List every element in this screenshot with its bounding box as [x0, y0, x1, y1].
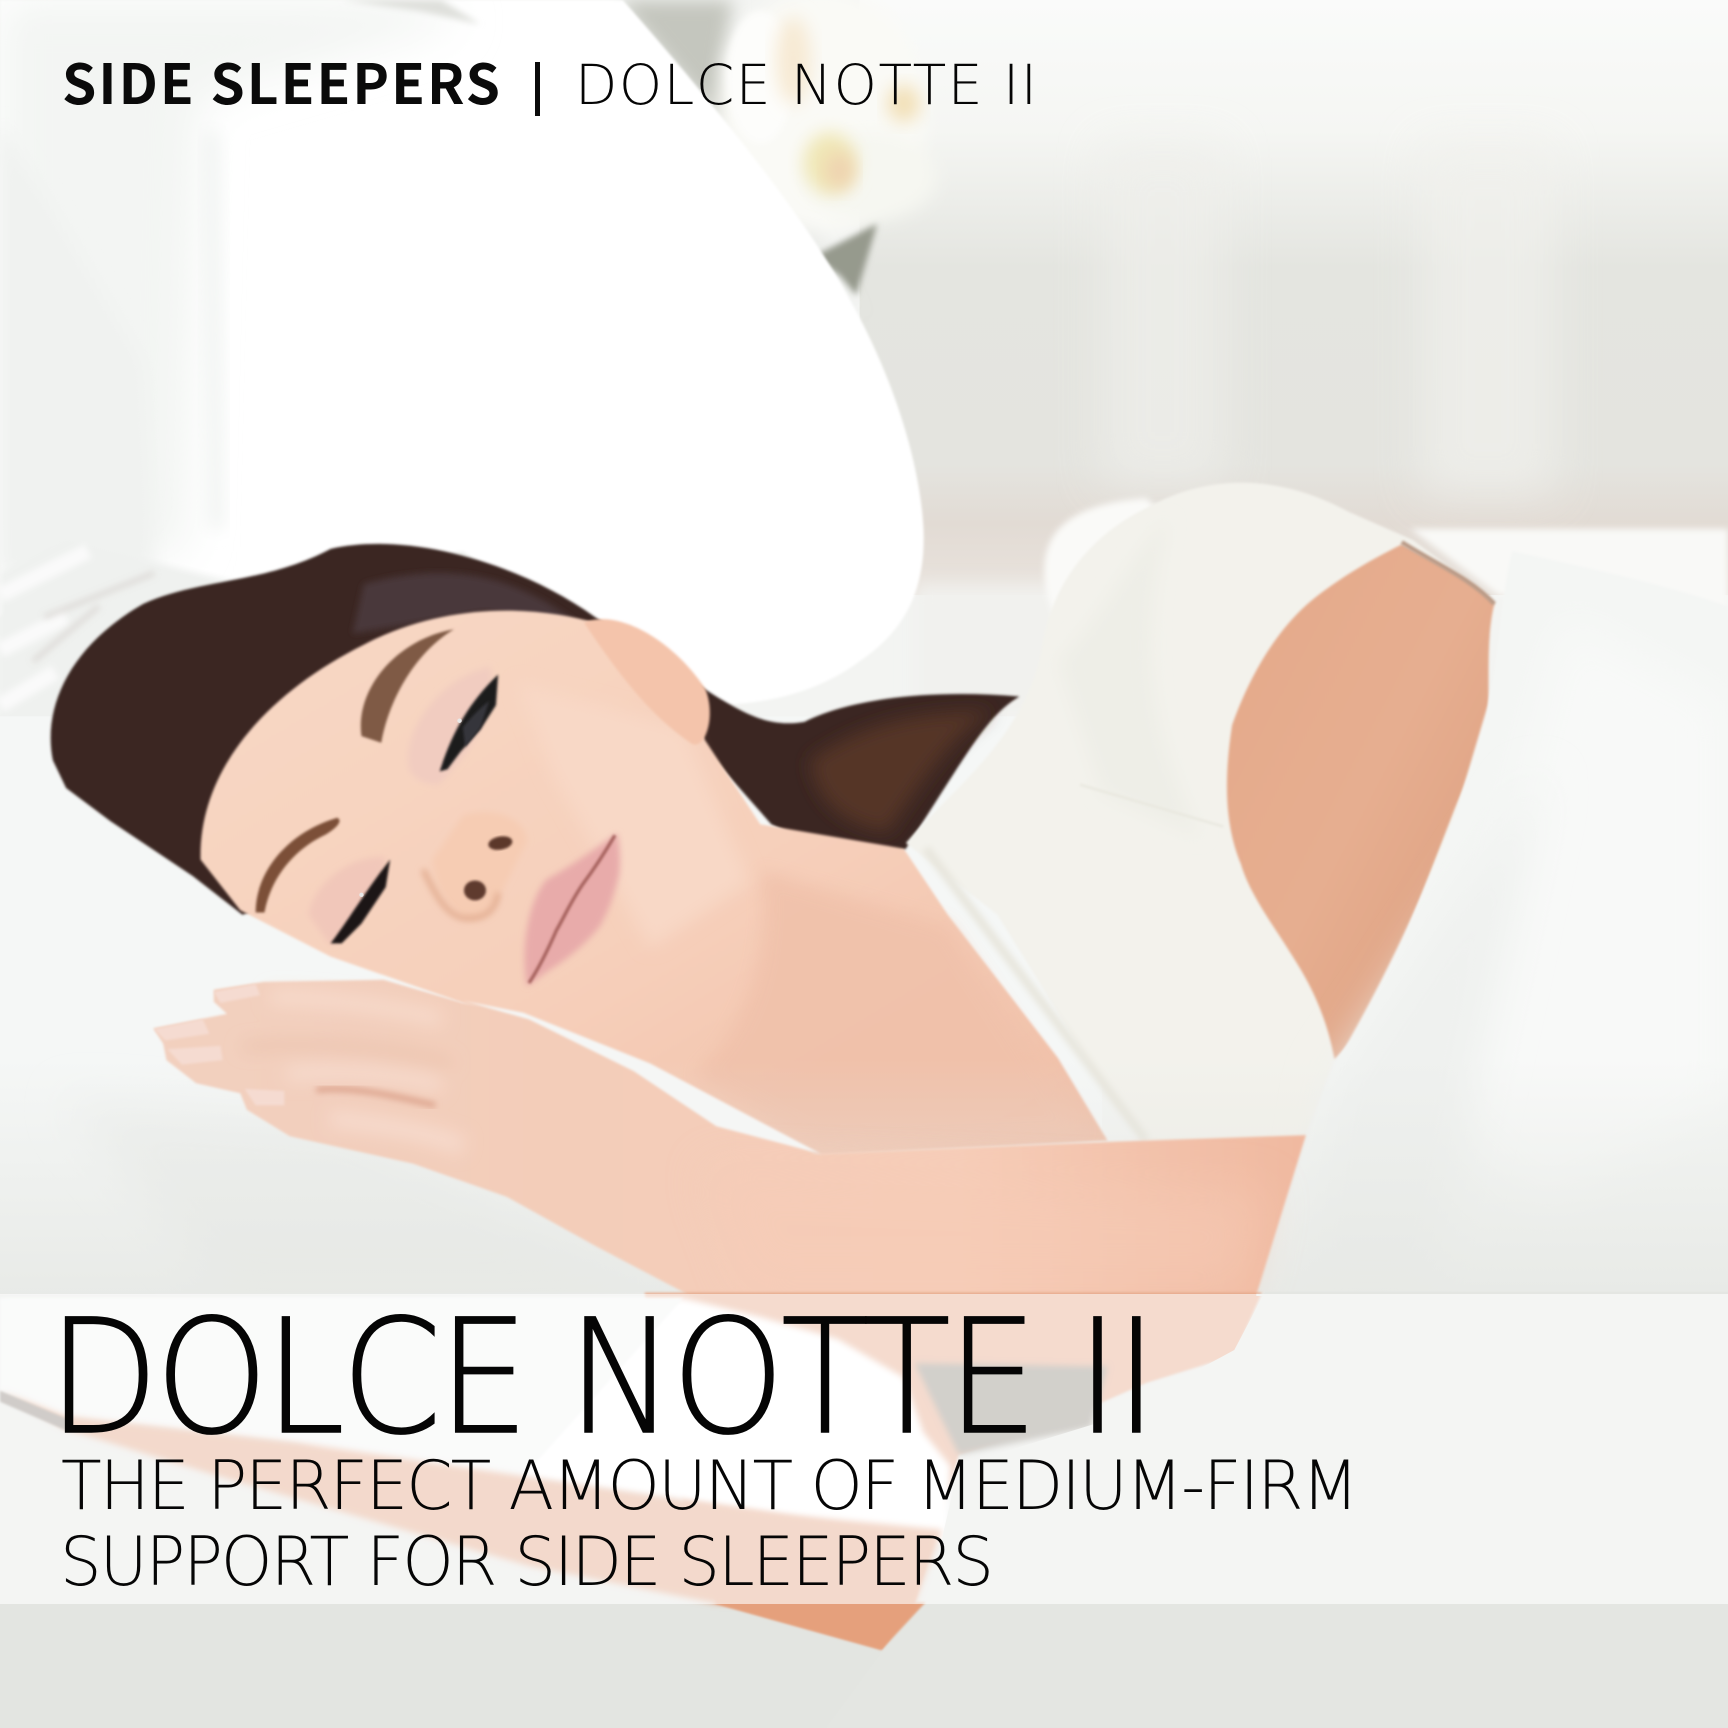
header: divider bar: [535, 62, 540, 116]
face and neck: [201, 611, 1108, 1155]
header line: [62, 40, 1037, 120]
lower body seen through translucent band: [0, 1292, 1728, 1728]
main title: DOLCE NOTTE II: [48, 1286, 1154, 1470]
hair: [33, 544, 1019, 915]
ear: [584, 619, 710, 744]
duvet bottom left and pillow under head: [0, 716, 1728, 1728]
flowers in background: [617, 0, 937, 320]
shirt: [906, 483, 1488, 1146]
fingernails: [154, 984, 284, 1105]
nose: [423, 812, 527, 920]
white pillow bump behind shoulder: [1044, 498, 1168, 628]
header: category: SIDE SLEEPERS: [62, 40, 500, 120]
translucent title band: [0, 1294, 1728, 1604]
header: product: DOLCE NOTTE II: [575, 53, 1037, 117]
large white pillow behind head: [0, 0, 924, 771]
forearm and hand: [153, 980, 1306, 1295]
duvet on right: [838, 551, 1728, 1728]
subtitle: THE PERFECT AMOUNT OF MEDIUM-FIRM: [61, 1447, 1357, 1526]
soft shading low in frame: [0, 1058, 1728, 1311]
upper arm skin: [1227, 542, 1494, 1059]
upper eye: [361, 629, 498, 785]
subtitle: SUPPORT FOR SIDE SLEEPERS: [60, 1523, 992, 1602]
lips: [524, 833, 620, 986]
subtitle: [60, 1447, 1357, 1602]
lower eye: [256, 818, 390, 946]
finger creases: [242, 997, 463, 1146]
pillow edge between hand and neck: [463, 1001, 821, 1154]
